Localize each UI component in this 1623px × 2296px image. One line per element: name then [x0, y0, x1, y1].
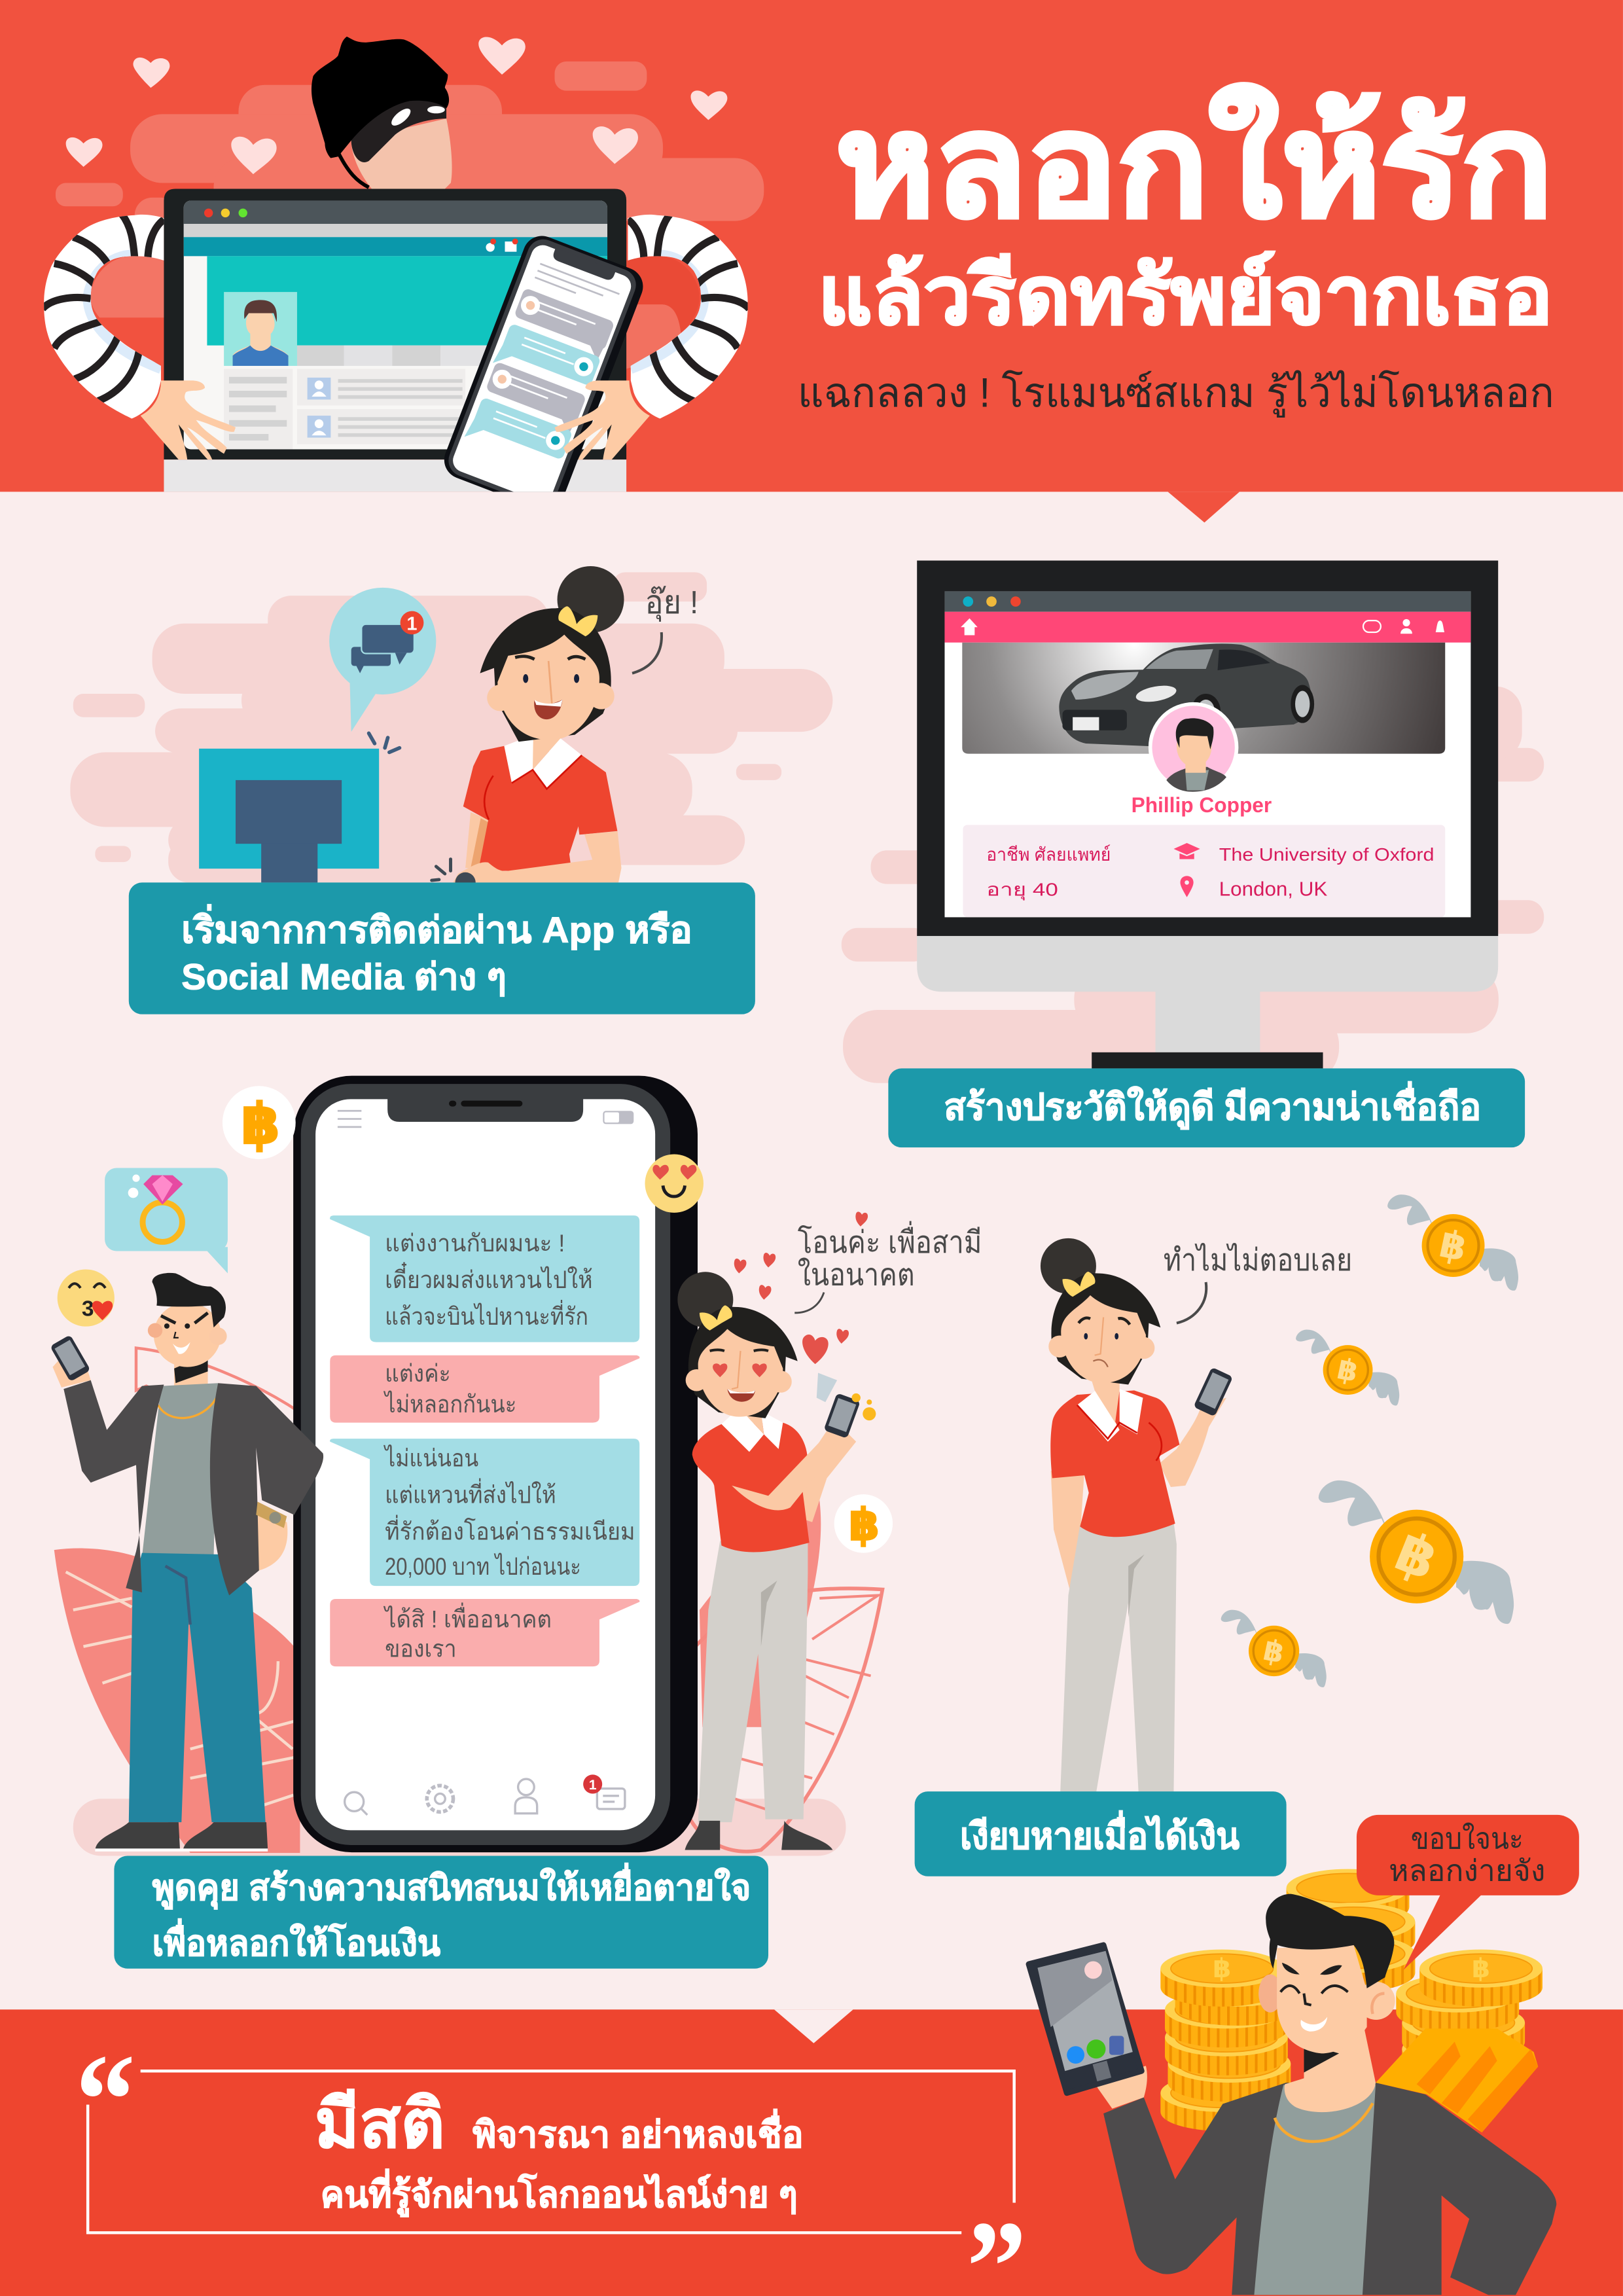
caption 1: เริ่มจากการติดต่อผ่าน App หรือ	[181, 904, 692, 950]
section 3 floor blob	[73, 1799, 846, 1856]
flying coin lower	[1221, 1610, 1327, 1687]
character: scammer man on left	[50, 1273, 323, 1852]
chat bubble 2: ไม่หลอกกันนะ	[383, 1390, 516, 1418]
icon: sports car	[1059, 644, 1314, 746]
icon: bitcoin badge right	[834, 1494, 893, 1553]
section 2 background cloud	[842, 687, 1544, 1083]
icon: kissing emoji	[58, 1269, 115, 1327]
icon: notification bubble: 1	[406, 614, 418, 635]
hearts around woman	[734, 1211, 868, 1364]
icon: bitcoin badge right: ฿	[849, 1500, 880, 1549]
collar	[484, 725, 582, 819]
speech: oops	[632, 584, 698, 673]
character: happy woman with phone	[677, 1272, 876, 1850]
callout headline	[315, 2087, 804, 2162]
profile details: อาชีพ ศัลยแพทย์	[986, 844, 1111, 865]
chat bubble 3: ไม่แน่นอน	[383, 1444, 478, 1472]
notification badge: 1	[589, 1777, 597, 1793]
icon: monitor rear view	[199, 733, 399, 882]
caption 1: Social Media ต่าง ๆ	[181, 956, 507, 997]
phone navigation icons	[345, 1779, 625, 1815]
icon: heart-shaped striped sleeves	[44, 215, 748, 419]
callout headline: พิจารณา อย่าหลงเชื่อ	[473, 2109, 804, 2155]
callout headline: มีสติ	[315, 2087, 445, 2162]
icon: home	[961, 619, 978, 636]
chat bubble 2: แต่งค่ะ	[385, 1360, 451, 1387]
flying coin lower: ฿	[1260, 1634, 1287, 1670]
character: sad woman	[1041, 1238, 1233, 1793]
chat bubble 4: ได้สิ ! เพื่ออนาคต	[383, 1603, 552, 1633]
flying coin upper middle: ฿	[1334, 1353, 1361, 1388]
profile details: อายุ 40	[986, 880, 1058, 901]
large smartphone with chat	[293, 1076, 698, 1852]
speech: pay for future	[794, 1221, 982, 1313]
caption 3: เพื่อหลอกให้โอนเงิน	[152, 1918, 440, 1964]
flying coin large	[1319, 1480, 1514, 1624]
icon: thief hand right	[555, 380, 650, 459]
caption 4: เงียบหายเมื่อได้เงิน	[960, 1810, 1240, 1856]
caption 2: สร้างประวัติให้ดูดี มีความน่าเชื่อถือ	[944, 1081, 1481, 1130]
icon: thief hand left	[141, 380, 236, 459]
cover photo with car	[962, 643, 1445, 754]
character: woman at computer	[432, 566, 624, 893]
speech bubble: thanks: ขอบใจนะ	[1411, 1821, 1524, 1855]
icon: leaves right	[688, 1500, 882, 1852]
notification badge	[583, 1774, 602, 1793]
flying coin top: ฿	[1436, 1223, 1471, 1270]
chat bubble 1: แล้วจะบินไปหานะที่รัก	[385, 1300, 588, 1330]
chat bubble 3: แต่แหวนที่ส่งไปให้	[385, 1479, 556, 1509]
icon: gold coin stacks	[1160, 1869, 1543, 2131]
profile details: The University of Oxford	[1219, 844, 1434, 865]
icon: bitcoin badge top	[223, 1086, 296, 1159]
icon: gold coin stacks: ฿	[1472, 1954, 1490, 1983]
icon: user	[1400, 619, 1412, 634]
speech bubble: thanks: หลอกง่ายจัง	[1389, 1856, 1545, 1888]
speech: oops: อุ๊ย !	[645, 584, 698, 622]
callout text: คนที่รู้จักผ่านโลกออนไลน์ง่าย ๆ	[321, 2168, 798, 2217]
icon: bell	[1436, 620, 1444, 632]
chat bubble 2	[330, 1355, 639, 1423]
speech bubble: thanks	[1357, 1815, 1579, 1970]
flying coin upper middle	[1296, 1329, 1399, 1406]
caption 2	[888, 1068, 1525, 1147]
panel: header band	[0, 0, 1623, 522]
caption 1	[129, 882, 755, 1014]
speech: why no reply	[1164, 1242, 1352, 1323]
chat bubble 4: ของเรา	[385, 1635, 457, 1662]
laptop with social profile screen	[164, 188, 626, 492]
caption 3	[114, 1856, 768, 1969]
speech: why no reply: ทำไมไม่ตอบเลย	[1164, 1242, 1352, 1277]
chat bubble 3	[330, 1439, 639, 1586]
chat bubble 1: แต่งงานกับผมนะ !	[385, 1230, 565, 1257]
tagline: แฉกลลวง ! โรแมนซ์สแกม รู้ไว้ไม่โดนหลอก	[798, 370, 1554, 418]
opening quote mark: “	[75, 2027, 135, 2173]
caption 3: พูดคุย สร้างความสนิทสนมให้เหยื่อตายใจ	[152, 1863, 751, 1910]
icon: notification bubble	[329, 588, 436, 732]
floating hearts	[66, 37, 727, 174]
flying coin top	[1387, 1194, 1518, 1291]
icon: bitcoin badge top: ฿	[241, 1093, 280, 1155]
icon: thief head	[312, 37, 452, 188]
chat bubble 3: 20,000 บาท ไปก่อนนะ	[385, 1552, 581, 1580]
icon: ring speech bubble	[105, 1168, 228, 1273]
icon: leaves left	[54, 1348, 300, 1853]
profile name: Phillip Copper	[1132, 793, 1272, 817]
icon: gold bars	[1376, 2028, 1538, 2132]
chat bubble 3: ที่รักต้องโอนค่าธรรมเนียม	[385, 1515, 635, 1545]
icon: profile avatar	[1150, 704, 1237, 792]
speech: pay for future: โอนค่ะ เพื่อสามี	[798, 1221, 982, 1259]
icon: tilted smartphone with chat	[444, 236, 643, 492]
section 1 background cloud	[70, 572, 832, 882]
subtitle: แล้วรีดทรัพย์จากเธอ	[818, 251, 1553, 341]
callout frame	[88, 2071, 1014, 2233]
speech: pay for future: ในอนาคต	[798, 1257, 915, 1291]
header background cloud	[56, 62, 764, 355]
character: laughing scammer	[1097, 1894, 1556, 2295]
panel: bottom band	[0, 2009, 1623, 2296]
monitor with fake profile	[917, 560, 1498, 1068]
icon: phone with apps	[1029, 1945, 1141, 2093]
chat bubble 4	[330, 1599, 639, 1666]
icon: chat	[1363, 620, 1381, 632]
caption 4	[915, 1791, 1287, 1876]
title: หลอกให้รัก	[836, 84, 1553, 246]
flying coin large: ฿	[1387, 1520, 1446, 1592]
profile details: London, UK	[1219, 879, 1327, 901]
icon: kissing emoji: 3	[82, 1297, 94, 1321]
chat bubble 1: เดี๋ยวผมส่งแหวนไปให้	[385, 1262, 593, 1293]
chat bubble 1	[330, 1215, 639, 1342]
icon: gold coin stacks: ฿	[1213, 1954, 1231, 1983]
icon: heart-eyes emoji	[645, 1154, 704, 1213]
profile details	[963, 825, 1445, 917]
